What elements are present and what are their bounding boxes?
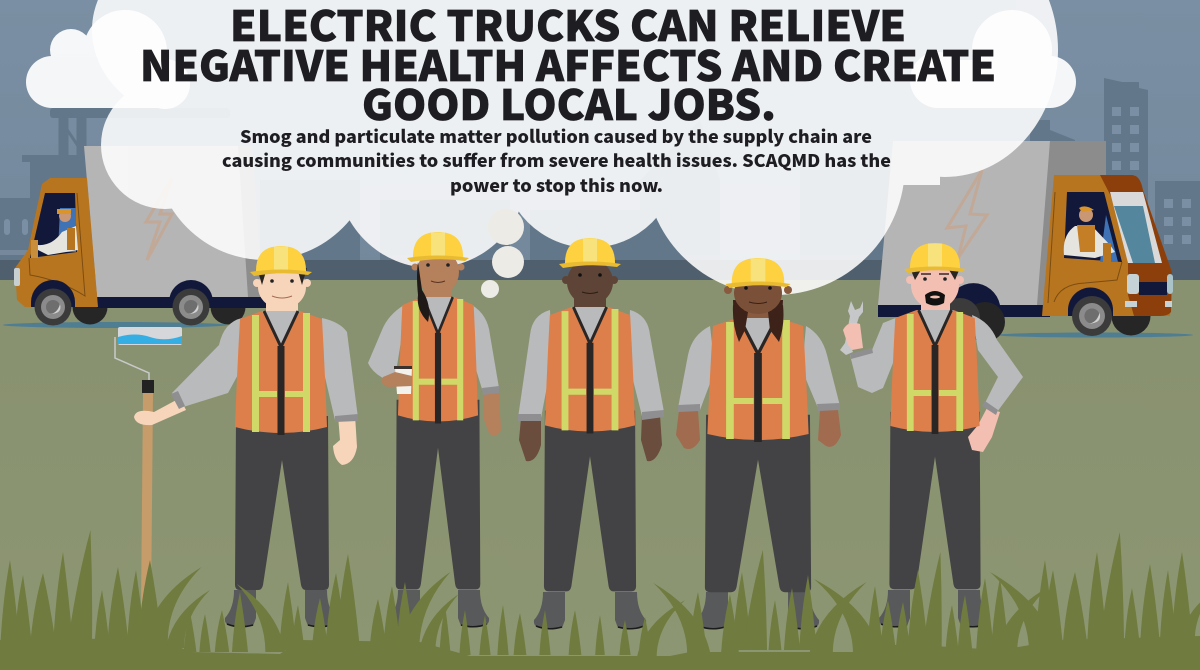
grille and lights — [1125, 274, 1173, 307]
sleeves — [518, 310, 664, 418]
boots — [879, 590, 989, 627]
helmet — [725, 258, 791, 288]
wheels — [940, 283, 1113, 342]
cargo box — [878, 141, 1050, 305]
worker 3 — [518, 238, 664, 629]
boots — [225, 590, 336, 627]
cab window and driver — [1064, 192, 1122, 263]
neck — [424, 285, 452, 330]
title: GOOD LOCAL JOBS. — [362, 72, 776, 132]
vest — [707, 318, 809, 442]
hands — [519, 415, 662, 461]
boots — [697, 592, 819, 629]
right hand — [333, 415, 357, 465]
big thought cloud — [92, 0, 1058, 295]
neck — [574, 288, 606, 340]
small cloud right — [910, 10, 1076, 108]
paint roller — [115, 327, 182, 610]
horizon band — [0, 260, 1200, 280]
windshield — [1110, 192, 1162, 263]
central factories — [260, 120, 1075, 260]
worker 2 with coffee cup — [368, 232, 501, 627]
forearm and hand on hip — [968, 408, 1000, 452]
head — [412, 249, 464, 295]
vest — [235, 311, 327, 435]
ground — [0, 280, 1200, 670]
chassis — [878, 305, 1050, 317]
boots — [534, 592, 646, 629]
cargo box — [84, 146, 262, 297]
vest — [890, 310, 980, 434]
lightning bolt — [947, 170, 987, 258]
trousers — [889, 412, 981, 589]
sleeves — [678, 326, 840, 410]
head — [562, 259, 618, 305]
trousers — [396, 400, 480, 589]
trousers — [235, 416, 329, 590]
cab — [1042, 175, 1172, 316]
sky background — [0, 0, 1200, 280]
ponytail — [417, 262, 429, 322]
vest — [398, 297, 478, 423]
cab — [15, 178, 98, 307]
right electric truck — [878, 141, 1193, 342]
intro text: power to stop this now. — [450, 173, 663, 198]
intro text: Smog and particulate matter pollution caused by the supply chain are — [240, 124, 872, 149]
hands — [676, 410, 841, 449]
sleeves — [850, 315, 1023, 412]
worker 1 with paint roller — [115, 246, 358, 627]
head — [906, 261, 964, 309]
head — [253, 265, 311, 309]
raised hand — [843, 323, 863, 350]
worker 5 with wrench — [840, 243, 1023, 627]
helmet — [407, 232, 469, 262]
left hand and forearm — [134, 398, 186, 425]
trousers — [705, 415, 811, 592]
dual tires — [1112, 296, 1150, 336]
boots — [389, 590, 489, 627]
title: NEGATIVE HEALTH AFFECTS AND CREATE — [140, 33, 996, 93]
head — [724, 272, 792, 314]
headlight — [14, 268, 20, 286]
door outline — [29, 193, 85, 296]
wrench — [840, 301, 863, 355]
hand holding cup — [382, 372, 412, 387]
city skyline — [0, 78, 1200, 262]
dual rear tires — [72, 290, 246, 324]
long hair — [733, 300, 783, 338]
ground shadow — [997, 332, 1193, 338]
neck — [921, 298, 950, 340]
building right — [1155, 181, 1200, 261]
worker 4 — [676, 258, 841, 629]
foreground grass — [0, 530, 1200, 670]
helmet — [250, 246, 312, 276]
chassis — [97, 297, 269, 308]
thought bubbles — [481, 209, 524, 298]
factory silhouette left — [0, 108, 230, 260]
door outline — [1048, 192, 1122, 303]
ground shadow — [3, 322, 227, 328]
helmet — [904, 243, 966, 273]
lightning bolt — [146, 178, 172, 260]
gray sleeves — [172, 318, 358, 420]
coffee cup — [394, 366, 412, 394]
window and driver — [30, 193, 78, 258]
neck — [744, 303, 772, 345]
right hand — [484, 392, 501, 436]
sleeves — [368, 305, 499, 389]
small cloud left — [26, 10, 190, 109]
wheels — [31, 280, 213, 326]
helmet — [559, 238, 621, 268]
intro text: causing communities to suffer from severe health issues. SCAQMD has the — [222, 148, 891, 173]
tower right — [1104, 78, 1148, 262]
left electric truck — [3, 146, 269, 328]
neck — [266, 300, 298, 345]
vest — [545, 307, 635, 433]
trousers — [544, 410, 636, 591]
